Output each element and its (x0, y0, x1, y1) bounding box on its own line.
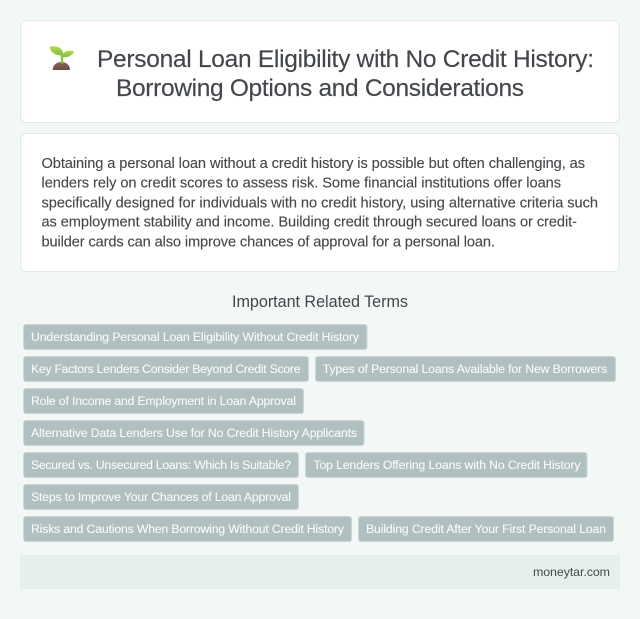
text block: intro paragraph: lenders rely on credit scores to assess risk. Some financial institutions offer loans (42, 176, 561, 192)
icon: sprout (50, 46, 74, 70)
tag: types of loans: Types of Personal Loans Available for New Borrowers (323, 362, 607, 376)
text block: intro paragraph: specifically designed for individuals with no credit history, using alternative criteria such (42, 196, 598, 212)
tag list: related terms (24, 324, 616, 542)
tag: key factors (24, 356, 308, 382)
tag: risks and cautions (24, 516, 352, 542)
tag: income and employment (24, 388, 304, 414)
tag: key factors: Key Factors Lenders Consider Beyond Credit Score (31, 362, 301, 376)
heading: title: Personal Loan Eligibility with No Credit History: (97, 46, 594, 73)
tag: secured vs unsecured (24, 452, 298, 478)
tag: steps to improve (24, 484, 298, 510)
panel: header card (20, 20, 620, 122)
heading: important related terms: Important Related Terms (232, 293, 408, 311)
tag: top lenders (306, 452, 587, 478)
heading: title (97, 46, 594, 102)
text block: intro paragraph: as employment stability and income. Building credit through secured loans or credit- (42, 214, 577, 230)
tag: top lenders: Top Lenders Offering Loans with No Credit History (314, 458, 581, 472)
text block: intro paragraph: Obtaining a personal loan without a credit history is possible but often challenging, as (42, 156, 585, 172)
tag: income and employment: Role of Income and Employment in Loan Approval (31, 394, 296, 408)
tag: types of loans (316, 356, 616, 382)
tag: building credit: Building Credit After Your First Personal Loan (366, 522, 606, 536)
tag: alternative data: Alternative Data Lenders Use for No Credit History Applicants (31, 426, 357, 440)
footer source text: moneytar.com (533, 565, 610, 579)
tag: understanding eligibility (24, 324, 367, 350)
footer (20, 555, 620, 589)
tag: risks and cautions: Risks and Cautions When Borrowing Without Credit History (31, 522, 345, 536)
tag: understanding eligibility: Understanding Personal Loan Eligibility Without Credit History (31, 330, 360, 344)
text block: intro paragraph (42, 156, 598, 250)
tag: secured vs unsecured: Secured vs. Unsecured Loans: Which Is Suitable? (31, 458, 291, 472)
heading: title: Borrowing Options and Considerations (116, 75, 524, 102)
panel: intro paragraph card (20, 134, 620, 272)
tag: alternative data (24, 420, 364, 446)
tag: building credit (358, 516, 614, 542)
tag: steps to improve: Steps to Improve Your Chances of Loan Approval (31, 490, 291, 504)
text block: intro paragraph: builder cards can also improve chances of approval for a personal loan. (42, 234, 495, 250)
